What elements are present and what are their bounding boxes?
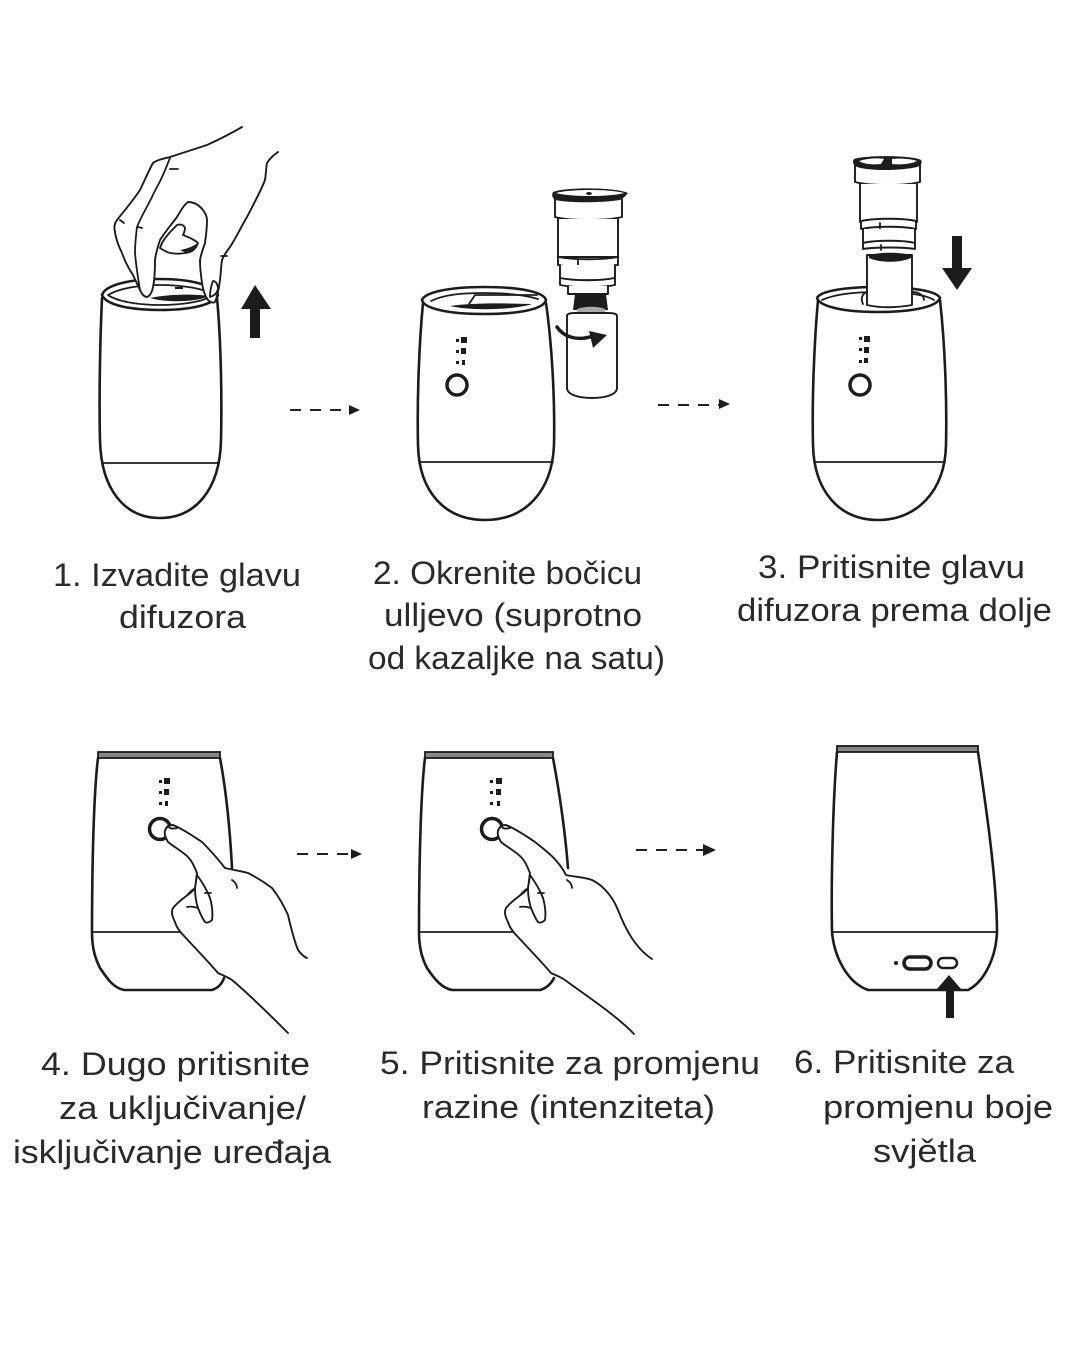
step 5 illustration: press to change level <box>419 752 652 1034</box>
step 3 illustration: press diffuser head <box>813 156 972 520</box>
caption 3 <box>737 549 1052 628</box>
diffuser body 4 <box>92 758 224 990</box>
caption 6 <box>794 1044 1053 1169</box>
caption 2: 2. Okrenite bočicu <box>373 555 642 591</box>
caption 5: 5. Pritisnite za promjenu <box>380 1045 760 1081</box>
rotation arrow <box>557 327 590 338</box>
step 4 illustration: long press button <box>92 752 307 1033</box>
diffuser head 3 <box>855 165 920 185</box>
caption 4: 4. Dugo pritisnite <box>41 1046 310 1082</box>
caption 4 <box>13 1046 331 1170</box>
hand 1 <box>114 127 278 303</box>
caption 2 <box>368 555 665 676</box>
oil bottle <box>567 313 617 398</box>
indicator dots 4 <box>159 778 170 806</box>
caption 1 <box>53 557 301 635</box>
hand 4 <box>165 825 307 1033</box>
step 6 illustration: back of diffuser <box>832 746 997 1018</box>
dashed arrow 4-5 <box>297 849 362 859</box>
up arrow to switch <box>937 975 961 1018</box>
caption 4: isključivanje uređaja <box>13 1134 331 1170</box>
caption 1: difuzora <box>119 599 246 635</box>
diffuser body 1 <box>100 298 221 518</box>
diffuser body 5 <box>419 758 554 990</box>
indicator dots 5 <box>490 778 502 806</box>
up arrow <box>241 285 271 338</box>
caption 1: 1. Izvadite glavu <box>53 557 301 593</box>
rear switch ports <box>894 961 898 965</box>
dashed arrow 1-2 <box>290 405 360 415</box>
caption 2: ulljevo (suprotno <box>384 597 642 633</box>
diffuser body 2 <box>418 303 554 520</box>
caption 4: za uključivanje/ <box>59 1090 306 1126</box>
dashed arrow 5-6 <box>636 844 716 856</box>
step 2 illustration: twist oil bottle <box>418 188 628 520</box>
caption 5: razine (intenziteta) <box>422 1089 715 1125</box>
step 1 illustration: lifting diffuser head <box>100 127 278 518</box>
button 5 <box>482 818 502 840</box>
diffuser body 3 <box>813 300 946 520</box>
caption 6: promjenu boje <box>823 1089 1053 1125</box>
caption 5 <box>380 1045 760 1125</box>
caption 3: 3. Pritisnite glavu <box>758 549 1025 585</box>
button and dots 3 <box>850 375 870 395</box>
bottle in body <box>867 255 912 307</box>
caption 6: 6. Pritisnite za <box>794 1044 1014 1080</box>
diffuser head 2 <box>555 199 622 220</box>
caption 2: od kazaljke na satu) <box>368 640 665 676</box>
hand 5 <box>498 825 652 1034</box>
button 4 <box>150 818 170 840</box>
caption 6: svjětla <box>873 1133 976 1169</box>
down arrow <box>942 236 972 290</box>
button and dots 2 <box>447 375 467 395</box>
caption 3: difuzora prema dolje <box>737 592 1052 628</box>
diffuser body 6 <box>832 752 997 990</box>
dashed arrow 2-3 <box>658 399 730 409</box>
